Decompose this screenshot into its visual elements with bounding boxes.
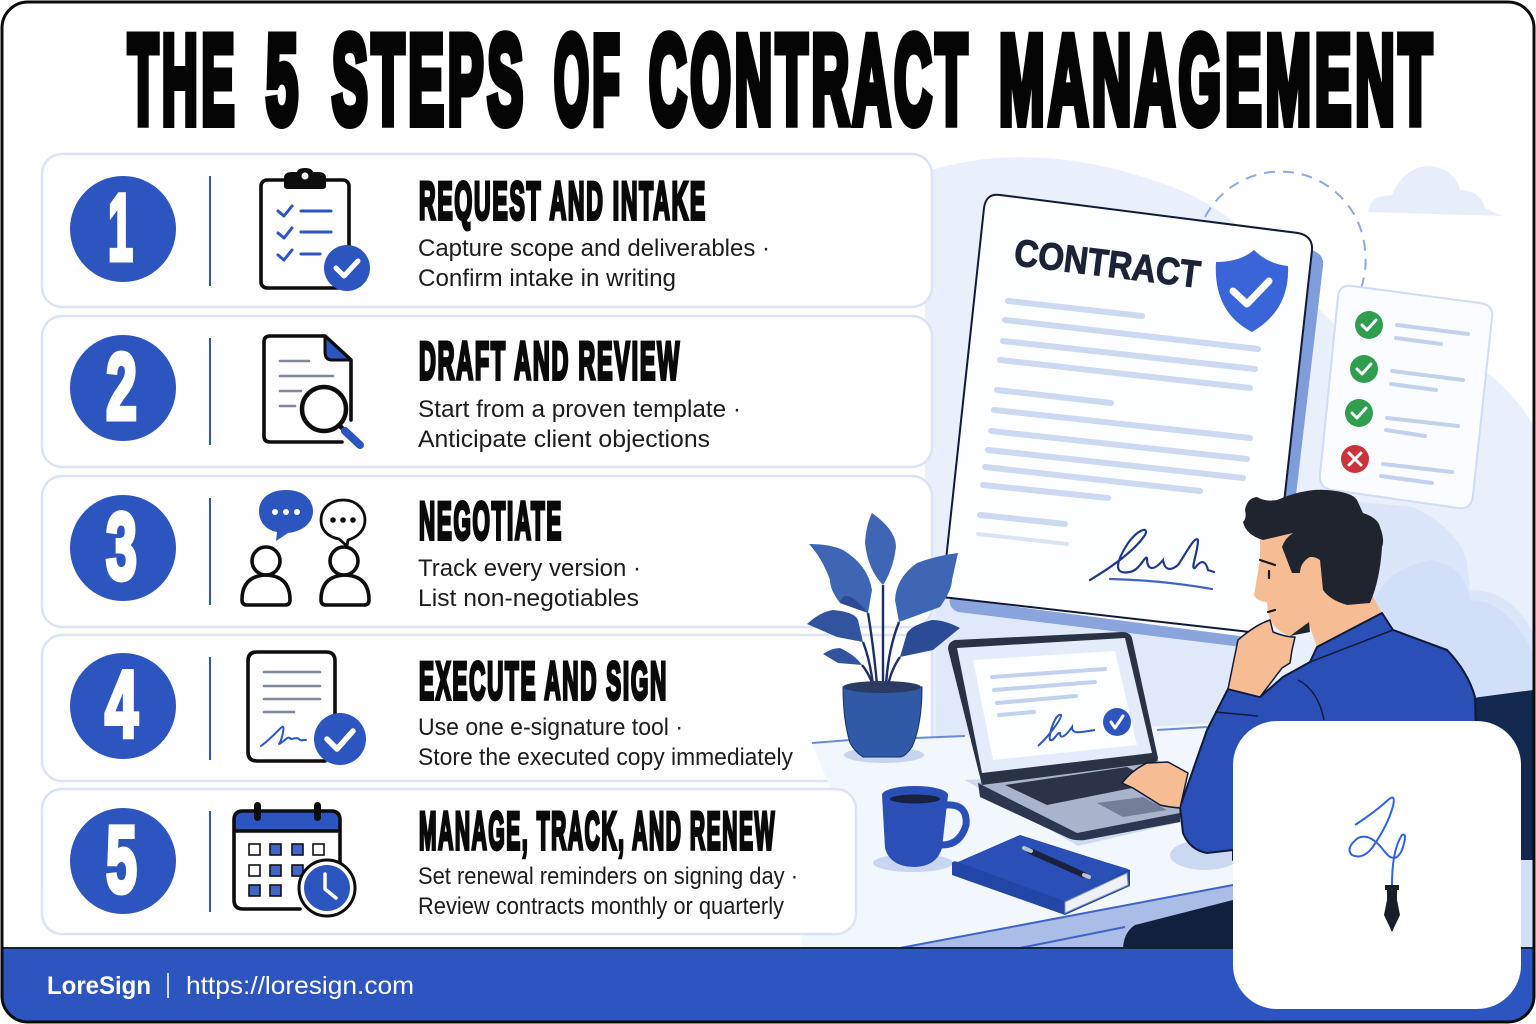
text block: step 5 description: Set renewal reminders on signing day · [418,863,798,890]
illustration: checklist card [1320,286,1492,508]
footer url: https://loresign.com [186,972,414,1000]
icon: pen nib [1384,885,1400,932]
text block: step 2 description: Anticipate client objections [418,426,710,453]
text block: step 4 description: Store the executed copy immediately [418,744,793,771]
panel: step 1 card: REQUEST AND INTAKE [419,172,707,231]
text block: step 5 description: Review contracts monthly or quarterly [418,893,784,920]
number badge 4 [70,652,176,759]
hair [1243,490,1383,605]
text block: step 4 description [418,714,793,771]
illustration: coffee mug [873,786,966,872]
text block: step 2 description: Start from a proven template · [418,396,741,423]
logo signature [1350,798,1405,885]
background illustration: hills and cloud [925,157,1536,948]
panel: step 1 card [42,154,932,307]
facial details [1260,560,1275,612]
text block: step 5 description [418,863,798,920]
icon: clipboard checklist [261,168,370,291]
panel: step 2 card [42,316,932,467]
panel: step 5 card [42,789,856,934]
illustration: dashed orbit [1205,172,1366,298]
shirt and arm [1180,613,1480,860]
text block: step 4 description: Use one e-signature tool · [418,714,683,741]
text: MANAGE, TRACK, AND RENEW [419,802,776,861]
footer brand: LoreSign [47,972,151,1000]
number badge 3 [70,494,176,601]
number badge 1 [70,175,176,282]
illustration: plant in pot [807,513,960,763]
logo card [1233,721,1521,1009]
text block: step 1 description: Confirm intake in writing [418,265,676,292]
title: STEPS [332,11,527,150]
icon: calendar with clock [234,802,355,916]
number badge 1: 1 [108,175,133,281]
panel: step 3 card [42,476,932,627]
chin hand [1228,620,1295,697]
text block: step 1 description: Capture scope and deliverables · [418,235,770,262]
desk surface [800,722,1240,948]
chair back [1395,690,1533,860]
text block: step 2 description [418,396,741,453]
title: 5 [266,11,302,150]
number badge 2: 2 [106,334,137,440]
text block: step 3 description: Track every version · [418,555,641,582]
illustration: man working at laptop [1122,490,1533,860]
contract signature [1090,530,1214,589]
number badge 2 [70,334,176,441]
ear [1302,559,1321,594]
illustration: laptop [948,632,1190,846]
panel: step 4 card [42,635,932,781]
panel: step 3 card: NEGOTIATE [419,492,563,551]
illustration: notebook and pen [952,835,1130,915]
text block: step 1 description [418,235,770,292]
title: CONTRACT [649,11,971,150]
icon: shield [1216,250,1288,332]
illustration: contract document [942,195,1323,648]
typing hand [1122,762,1188,808]
contract heading: CONTRACT [1012,232,1203,297]
icon: signed document [248,652,366,765]
title: THE [128,11,238,150]
neck and face [1254,530,1382,647]
contract text lines [978,301,1258,544]
icon: document with magnifier [264,336,360,445]
number badge 3: 3 [106,494,137,600]
title: OF [554,11,623,150]
number badge 4: 4 [105,652,138,758]
title [126,30,1434,129]
number badge 5 [70,807,176,914]
number badge 5: 5 [106,807,137,913]
text block: step 3 description [418,555,641,612]
panel: step 2 card: DRAFT AND REVIEW [419,332,681,391]
footer bar [0,948,1536,1024]
text block: step 3 description: List non-negotiables [418,585,639,612]
icon: two people negotiating [242,490,369,605]
panel: step 4 card: EXECUTE AND SIGN [419,652,668,711]
